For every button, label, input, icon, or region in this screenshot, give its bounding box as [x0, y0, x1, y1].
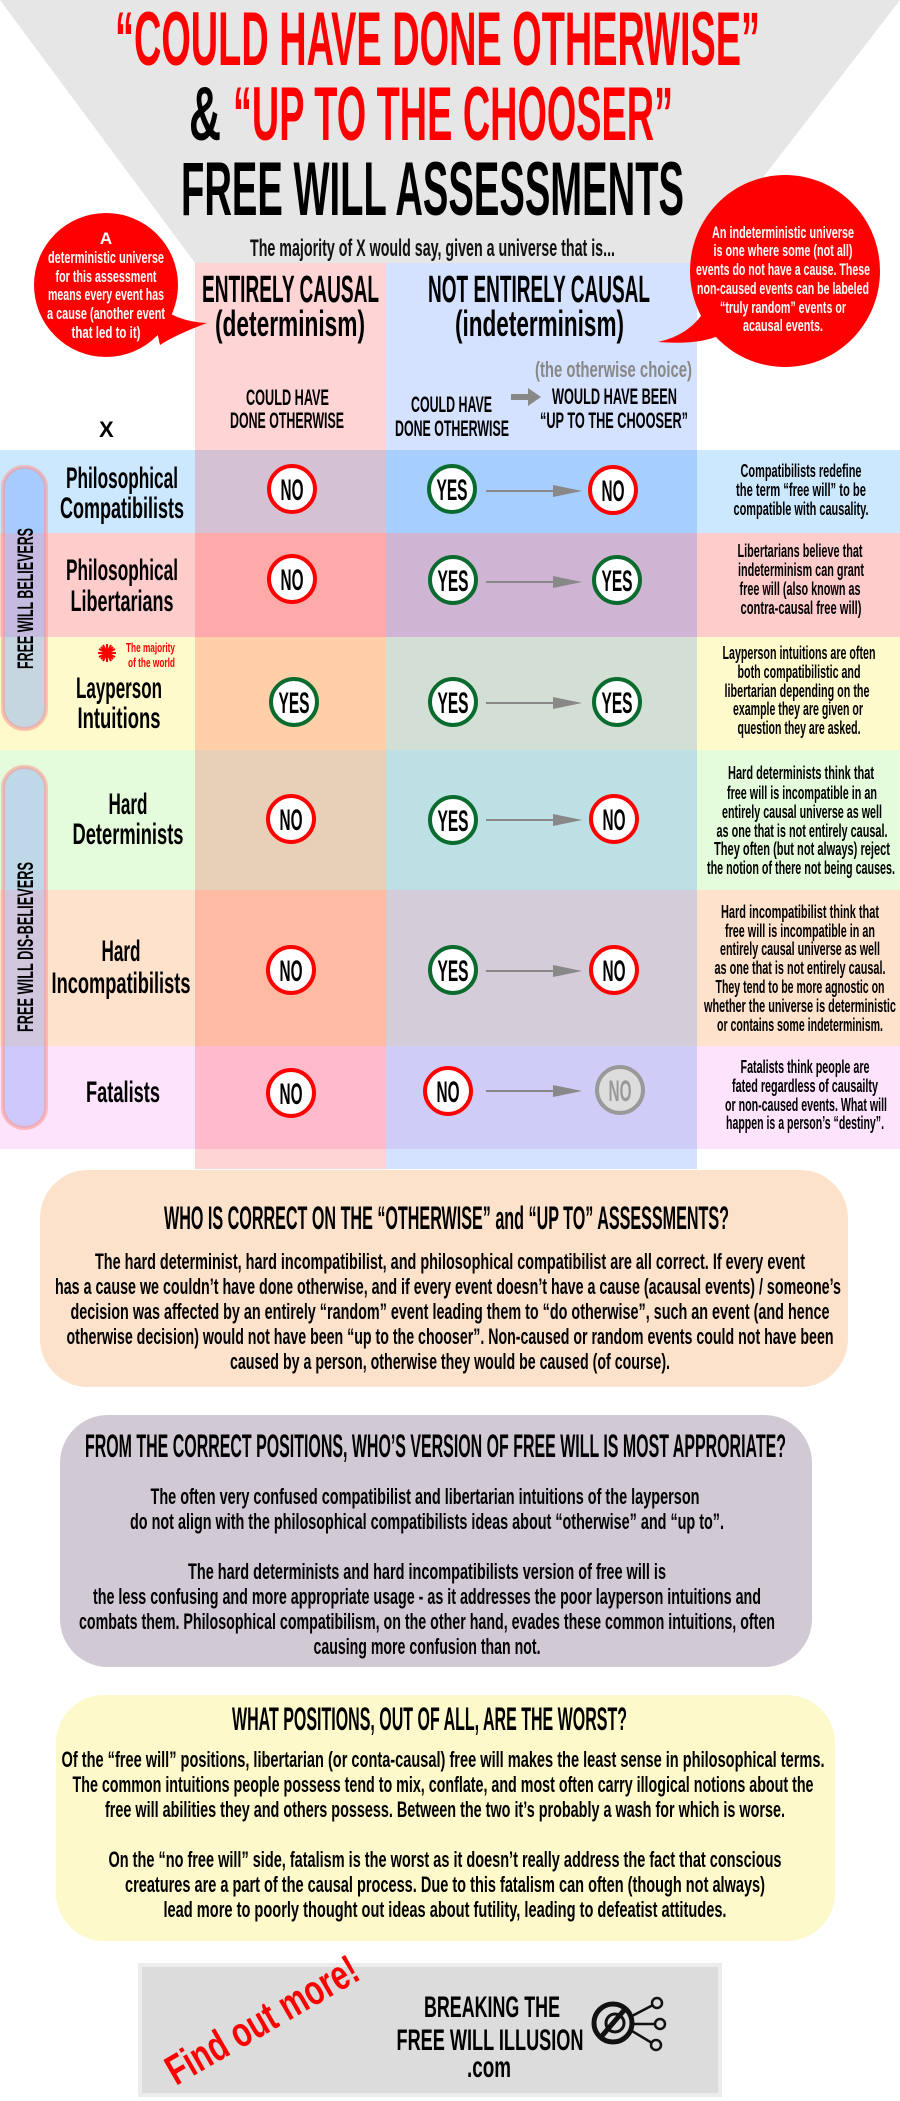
assessment circles: NO	[280, 474, 304, 507]
row labels: Philosophical	[66, 462, 178, 495]
row labels: Hard	[102, 935, 140, 968]
callout: deterministic: means every event has	[48, 285, 164, 304]
callout: deterministic: a cause (another event	[47, 304, 165, 323]
row labels: Fatalists	[86, 1076, 160, 1109]
title	[115, 0, 760, 232]
column headings: ENTIRELY CAUSAL	[202, 269, 379, 311]
callout: indeterministic: acausal events.	[743, 316, 823, 335]
subtitle: The majority of X would say, given a universe that is...	[250, 235, 615, 262]
note: majority of the world	[98, 640, 175, 670]
row labels: Hard	[108, 788, 148, 821]
panel: most appropriate: causing more confusion than not.	[314, 1634, 540, 1659]
callout: deterministic: A	[100, 229, 112, 248]
row labels	[52, 462, 190, 1109]
group pill: free will believers: FREE WILL BELIEVERS	[13, 528, 38, 669]
group pill: free will believers	[3, 467, 46, 729]
site name: .com	[467, 2051, 511, 2084]
background funnel	[0, 0, 900, 263]
group pill: free will dis-believers	[3, 767, 46, 1128]
site name: BREAKING THE	[424, 1991, 560, 2024]
row labels: Layperson	[76, 672, 162, 705]
row labels: Determinists	[72, 818, 184, 851]
site name	[396, 1991, 584, 2084]
note: majority of the world: The majority	[126, 640, 175, 655]
column headings: DONE OTHERWISE	[395, 416, 509, 441]
site name: FREE WILL ILLUSION	[396, 2024, 584, 2057]
row labels: Incompatibilists	[52, 967, 190, 1000]
group pill: free will dis-believers: FREE WILL DIS-BELIEVERS	[13, 862, 38, 1032]
column headings: NOT ENTIRELY CAUSAL	[428, 269, 650, 311]
callout: deterministic: for this assessment	[56, 267, 157, 286]
column headings: “UP TO THE CHOOSER”	[540, 408, 688, 433]
column headings: COULD HAVE	[246, 385, 329, 410]
panel: most appropriate: The hard determinists and hard incompatibilists version of free will is	[188, 1559, 666, 1584]
icon: logo	[594, 1998, 665, 2050]
assessment circles: NO	[602, 955, 626, 988]
assessment circles: NO	[608, 1075, 632, 1108]
row labels: Intuitions	[78, 702, 160, 735]
arrows	[486, 485, 582, 1097]
column headings: WOULD HAVE BEEN	[552, 384, 677, 409]
assessment circles: YES	[602, 687, 632, 720]
callout: deterministic	[34, 213, 207, 357]
assessment circles: YES	[438, 955, 468, 988]
title: &	[189, 72, 221, 157]
icon: header arrow	[511, 388, 541, 406]
assessment circles: YES	[602, 565, 632, 598]
panel: most appropriate	[60, 1415, 812, 1667]
assessment circles: YES	[438, 565, 468, 598]
row labels: Philosophical	[66, 554, 178, 587]
panel: who is correct: caused by a person, otherwise they would be caused (of course).	[230, 1349, 670, 1374]
panel: worst positions	[56, 1695, 835, 1941]
assessment circles: YES	[438, 687, 468, 720]
column headings: DONE OTHERWISE	[230, 408, 344, 433]
column headings: (determinism)	[215, 303, 365, 344]
assessment circles: NO	[280, 1078, 302, 1111]
row labels: Libertarians	[70, 585, 174, 618]
column headings: COULD HAVE	[411, 392, 492, 417]
assessment circles: NO	[602, 804, 626, 837]
note: majority of the world: of the world	[128, 655, 175, 670]
column headings: (the otherwise choice)	[535, 357, 692, 382]
column headings: X	[99, 417, 114, 442]
assessment circles: NO	[602, 475, 624, 508]
callout: deterministic: that led to it)	[72, 323, 140, 342]
assessment circles: NO	[280, 564, 304, 597]
find out more: Find out more!	[157, 1946, 367, 2094]
callout: indeterministic	[658, 175, 880, 367]
column headings	[99, 269, 692, 442]
column backgrounds	[195, 263, 697, 1169]
assessment circles: YES	[436, 474, 468, 507]
footer banner	[138, 1946, 722, 2097]
table rows backgrounds	[0, 450, 900, 1149]
assessment circles: NO	[280, 955, 302, 988]
assessment circles: NO	[436, 1076, 460, 1109]
callout: deterministic: deterministic universe	[48, 248, 164, 267]
assessment circles: NO	[280, 804, 302, 837]
column headings: (indeterminism)	[455, 303, 624, 344]
row labels: Compatibilists	[60, 492, 184, 525]
descriptions	[703, 461, 896, 1133]
assessment circles: YES	[278, 687, 310, 720]
panel: who is correct	[40, 1170, 848, 1387]
assessment circles: YES	[438, 805, 468, 838]
assessment circles	[268, 466, 643, 1116]
